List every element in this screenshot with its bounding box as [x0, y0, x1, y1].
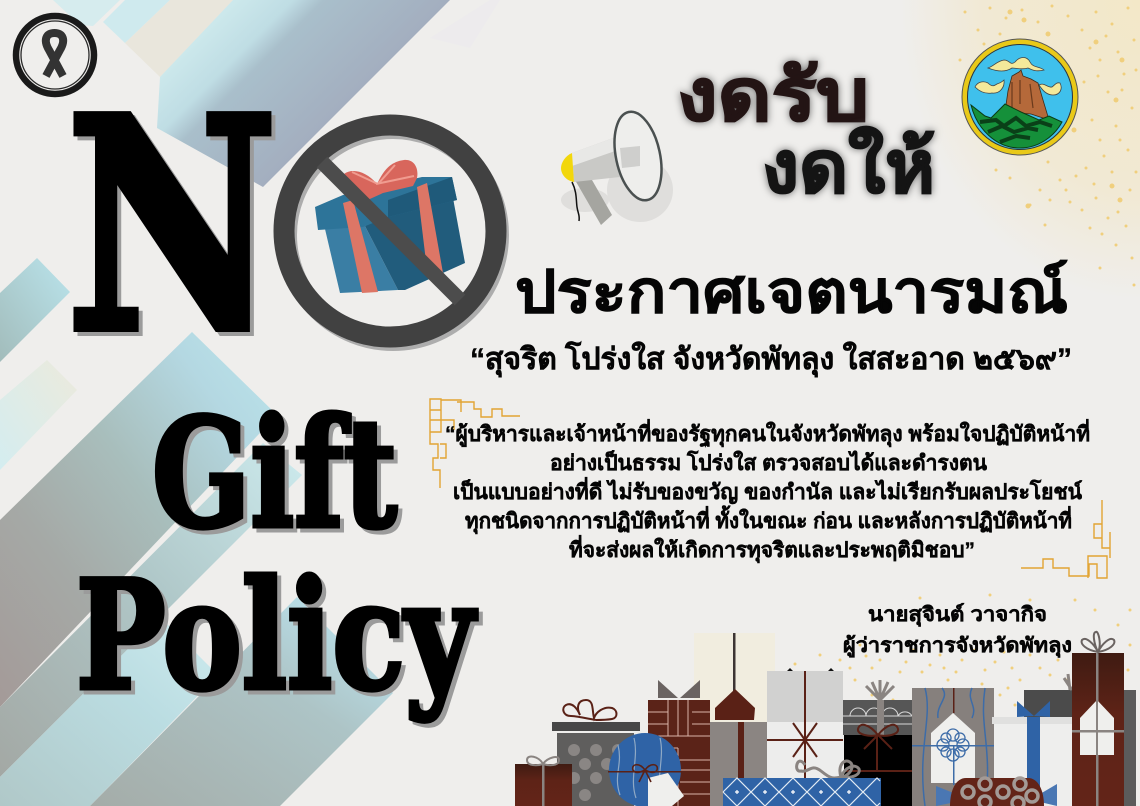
- heading: งดให้: งดให้: [762, 125, 935, 208]
- gold speckles: [795, 6, 1136, 705]
- illustration: gift boxes: [515, 632, 1136, 806]
- box: blue lattice: [723, 778, 881, 806]
- candy gift: [936, 778, 1057, 806]
- gold corner frame top-left: [430, 399, 520, 488]
- icon: mourning ribbon badge: [16, 16, 94, 94]
- pledge paragraph: “ผู้บริหารและเจ้าหน้าที่ของรัฐทุกคนในจังหวัดพัทลุง พร้อมใจปฏิบัติหน้าที่: [445, 418, 1090, 448]
- box: dark red small: [515, 757, 572, 806]
- prohibition ring: [284, 125, 499, 341]
- heading: ประกาศเจตนารมณ์: ประกาศเจตนารมณ์: [515, 259, 1068, 325]
- pledge paragraph: เป็นแบบอย่างที่ดี ไม่รับของขวัญ ของกำนัล และไม่เรียกรับผลประโยชน์: [453, 476, 1083, 505]
- box: dark scallop: [843, 680, 912, 735]
- icon: megaphone: [561, 107, 673, 225]
- icon: prohibited gift: [284, 125, 499, 341]
- box: cream tall: [694, 633, 775, 723]
- signature: นายสุจินต์ วาจากิจ: [868, 603, 1047, 627]
- pledge paragraph: อย่างเป็นธรรม โปร่งใส ตรวจสอบได้และดำรงตน: [550, 449, 988, 475]
- box: brick pattern: [648, 680, 710, 806]
- title: Policy: Policy: [76, 548, 477, 724]
- box: black with bow: [844, 725, 922, 806]
- box: tall dark red with tag: [1072, 632, 1124, 806]
- gift box: [315, 160, 465, 293]
- ornament: blue round gift: [608, 733, 684, 806]
- title: N: N: [66, 54, 278, 397]
- box: white with blue ribbon: [992, 701, 1074, 806]
- pledge paragraph: ทุกชนิดจากการปฏิบัติหน้าที่ ทั้งในขณะ ก่อน และหลังการปฏิบัติหน้าที่: [465, 505, 1072, 535]
- panel: pledge text: [422, 391, 1120, 584]
- icon: provincial seal: [962, 39, 1078, 155]
- box: dark grey back right: [1024, 674, 1136, 806]
- gold corner frame bottom-right: [1021, 500, 1110, 578]
- box: taupe with bow: [710, 689, 776, 806]
- box: grey hex pattern with bow: [552, 700, 640, 806]
- box: taupe with waves and tag: [912, 688, 994, 806]
- pledge paragraph: [445, 418, 1090, 564]
- top-left diagonal bands: [0, 0, 500, 806]
- tagline: “สุจริต โปร่งใส จังหวัดพัทลุง ใสสะอาด ๒๕๖๙”: [470, 340, 1072, 378]
- pledge paragraph: ที่จะส่งผลให้เกิดการทุจริตและประพฤติมิชอบ”: [569, 534, 975, 564]
- box: white with star: [767, 668, 843, 782]
- signature: [843, 603, 1072, 659]
- title: Gift: Gift: [152, 386, 397, 562]
- signature: ผู้ว่าราชการจังหวัดพัทลุง: [843, 634, 1072, 659]
- ribbon curl: [797, 761, 859, 778]
- heading: งดรับ: งดรับ: [677, 56, 869, 136]
